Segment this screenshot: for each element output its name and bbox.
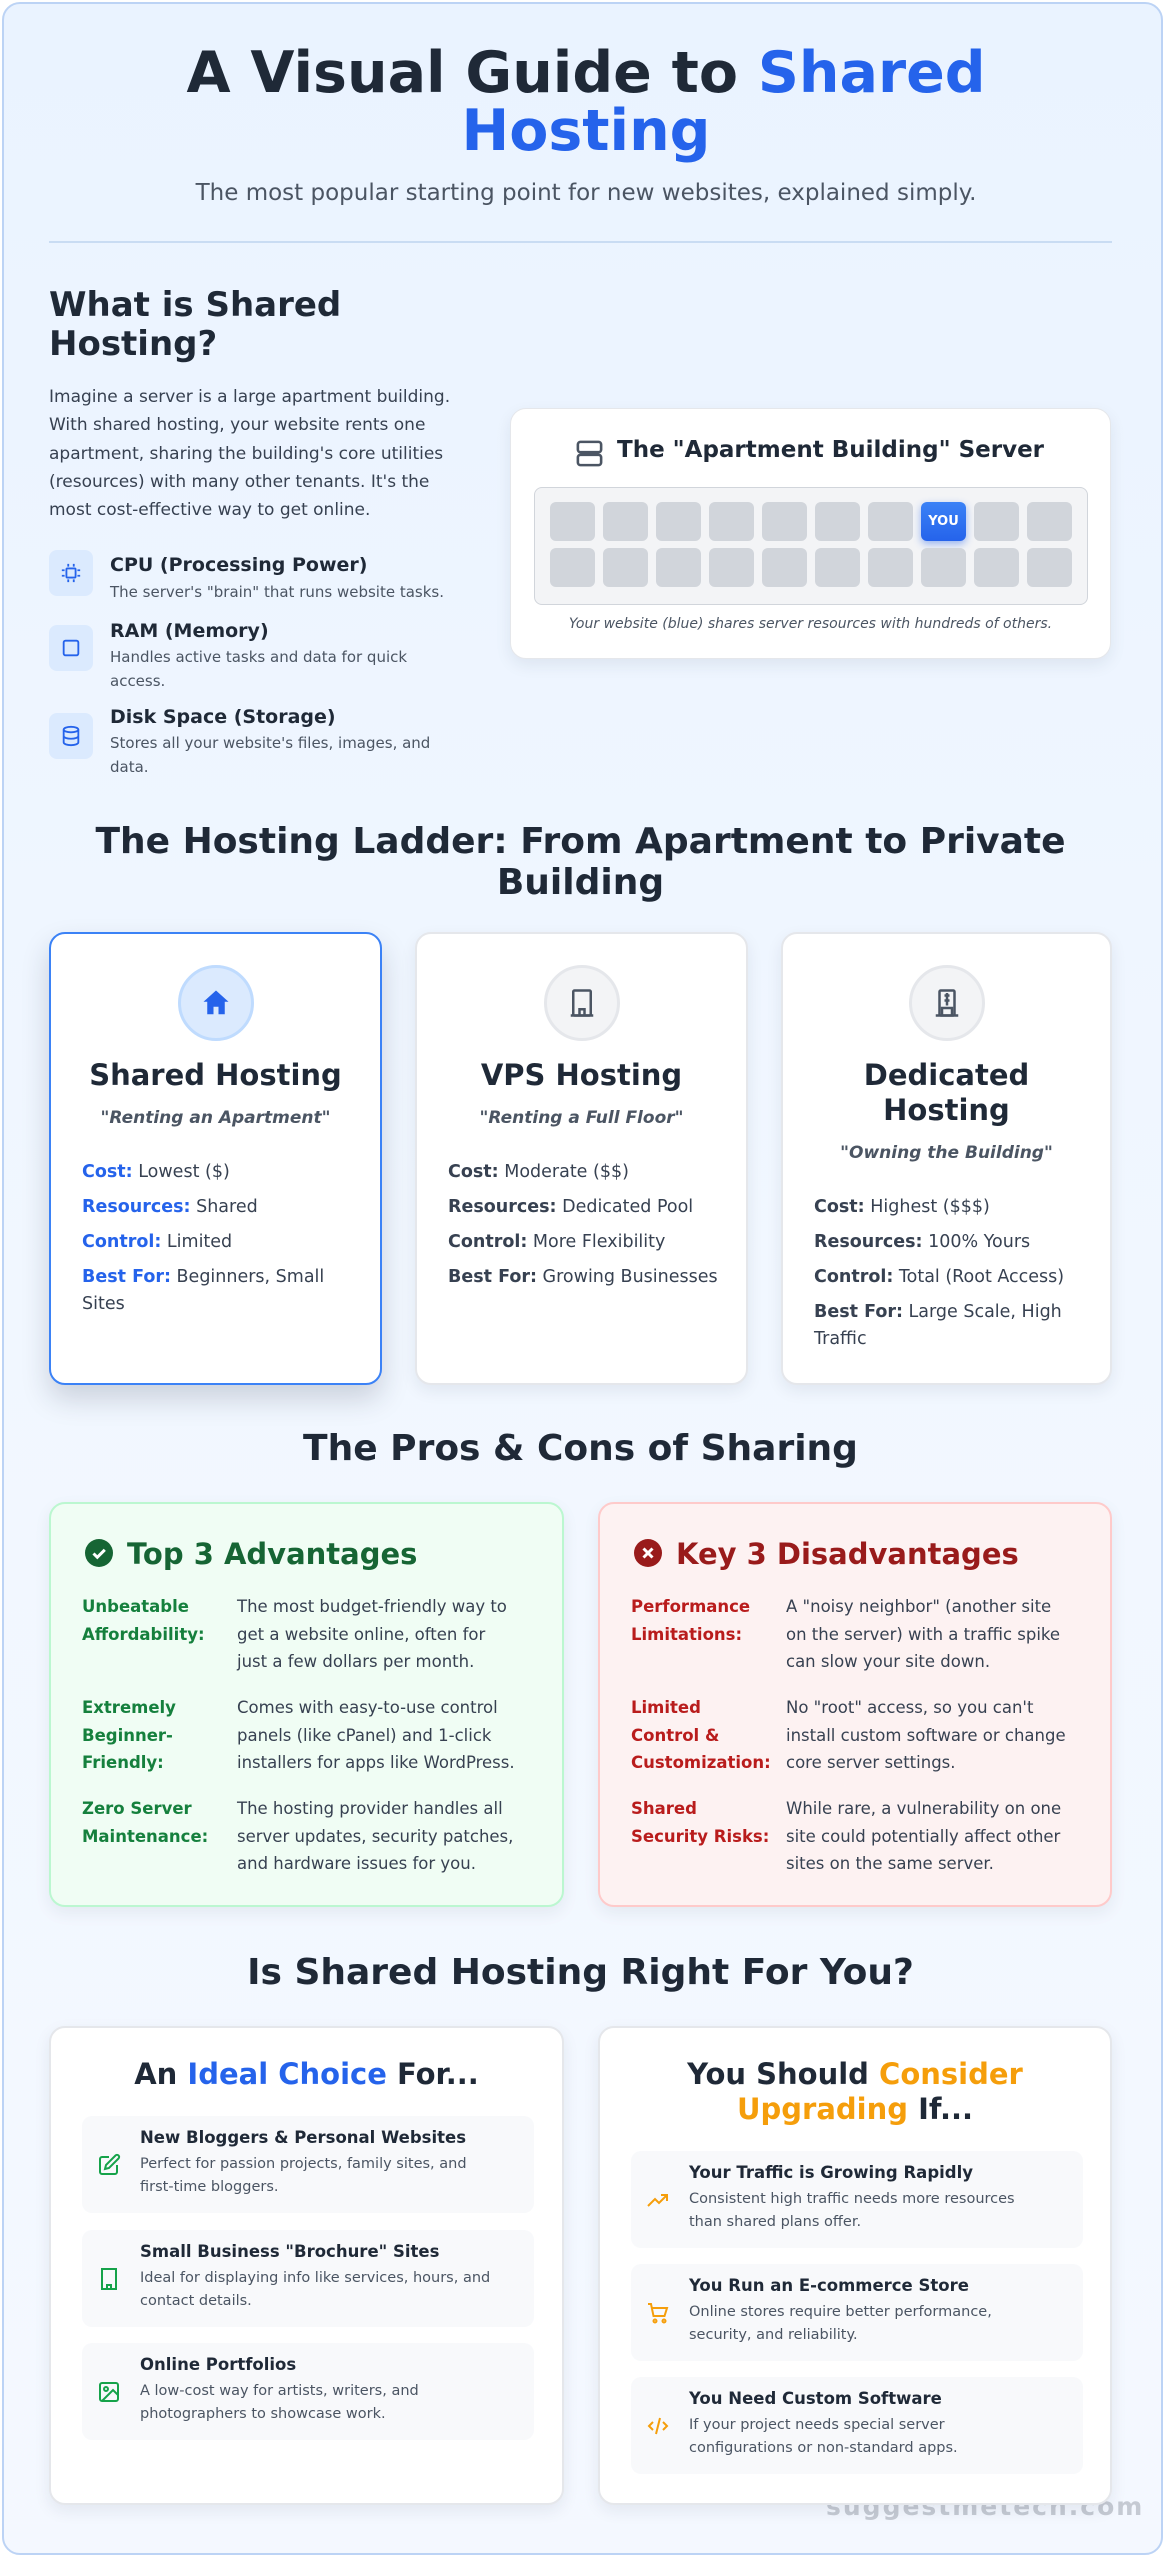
text block: explanation: (resources) with many other tenants. It's the xyxy=(49,472,429,492)
icon: building xyxy=(544,965,620,1041)
card: dedicated hosting: Traffic xyxy=(814,1329,867,1349)
card: VPS hosting xyxy=(415,932,748,1385)
panel: advantages: The hosting provider handles all xyxy=(237,1799,503,1818)
item: traffic xyxy=(631,2151,1083,2248)
text block: explanation: most cost-effective way to get online. xyxy=(49,500,370,520)
server grid xyxy=(534,487,1088,605)
title: A Visual Guide to Shared xyxy=(186,40,986,106)
item: traffic: than shared plans offer. xyxy=(689,2214,861,2230)
card: VPS hosting: VPS Hosting xyxy=(481,1058,682,1092)
icon: house xyxy=(178,965,254,1041)
item: custom software: You Need Custom Software xyxy=(689,2389,942,2408)
panel: disadvantages: site could potentially affect other xyxy=(786,1826,1060,1846)
panel: advantages: just a few dollars per month. xyxy=(237,1652,474,1671)
panel: disadvantages: install custom software or change xyxy=(786,1726,1066,1744)
item: business: Ideal for displaying info like services, hours, and xyxy=(140,2270,490,2286)
card: dedicated hosting: "Owning the Building" xyxy=(840,1143,1053,1163)
card: shared hosting: Resources: Shared xyxy=(82,1197,258,1217)
item: ecommerce: security, and reliability. xyxy=(689,2327,858,2343)
panel: consider upgrading: You Should Consider xyxy=(687,2057,1023,2091)
watermark: suggestmetech.com xyxy=(826,2492,1144,2521)
item: business xyxy=(82,2230,534,2327)
item: custom software: configurations or non-standard apps. xyxy=(689,2440,958,2456)
disadvantages heading: Key 3 Disadvantages xyxy=(676,1537,1019,1571)
panel: ideal choice xyxy=(49,2026,564,2505)
card: VPS hosting: Resources: Dedicated Pool xyxy=(448,1197,693,1217)
item: ecommerce: You Run an E-commerce Store xyxy=(689,2276,969,2295)
server grid: YOU xyxy=(928,514,959,529)
card: VPS hosting: "Renting a Full Floor" xyxy=(480,1108,683,1128)
panel: advantages: and hardware issues for you. xyxy=(237,1854,476,1873)
heading: hosting ladder: Building xyxy=(497,862,664,903)
item: portfolios xyxy=(82,2343,534,2440)
resource: Disk: Stores all your website's files, images, and xyxy=(110,734,430,752)
panel: disadvantages: Performance xyxy=(631,1597,750,1616)
panel: disadvantages xyxy=(598,1502,1112,1907)
panel: disadvantages: sites on the same server. xyxy=(786,1854,994,1873)
heading: is it right for you: Is Shared Hosting Right For You? xyxy=(247,1952,914,1993)
subtitle: The most popular starting point for new websites, explained simply. xyxy=(196,180,976,206)
item: business: contact details. xyxy=(140,2293,252,2309)
item: traffic: Your Traffic is Growing Rapidly xyxy=(689,2163,973,2182)
item: traffic: Consistent high traffic needs more resources xyxy=(689,2191,1015,2207)
heading: hosting ladder: The Hosting Ladder: From Apartment to Private xyxy=(95,821,1066,862)
panel: advantages: Maintenance: xyxy=(82,1826,208,1846)
panel: advantages xyxy=(49,1502,564,1907)
item: bloggers: New Bloggers & Personal Websites xyxy=(140,2128,466,2147)
panel: disadvantages: While rare, a vulnerability on one xyxy=(786,1799,1061,1818)
panel: apartment building server xyxy=(510,408,1111,659)
title xyxy=(186,40,986,164)
card: dedicated hosting: Resources: 100% Yours xyxy=(814,1232,1030,1252)
panel: advantages: Beginner- xyxy=(82,1726,173,1744)
panel: advantages: Comes with easy-to-use control xyxy=(237,1698,498,1717)
card: dedicated hosting: Cost: Highest ($$$) xyxy=(814,1197,990,1217)
panel: disadvantages: No "root" access, so you can't xyxy=(786,1698,1033,1717)
resource: CPU: CPU (Processing Power) xyxy=(110,554,367,576)
panel: advantages: Affordability: xyxy=(82,1624,205,1644)
icon: tower xyxy=(908,965,984,1041)
card: dedicated hosting: Hosting xyxy=(883,1093,1010,1127)
card: VPS hosting: Control: More Flexibility xyxy=(448,1232,665,1252)
card: VPS hosting: Best For: Growing Businesses xyxy=(448,1267,718,1287)
panel: disadvantages: Limitations: xyxy=(631,1624,742,1644)
text block: explanation xyxy=(49,387,450,520)
panel: advantages: get a website online, often for xyxy=(237,1624,485,1644)
panel: consider upgrading: Upgrading If... xyxy=(737,2092,973,2126)
resource: RAM: access. xyxy=(110,672,165,690)
card: dedicated hosting: Best For: Large Scale, High xyxy=(814,1302,1062,1322)
panel: disadvantages: Security Risks: xyxy=(631,1826,769,1846)
card: dedicated hosting: Control: Total (Root Access) xyxy=(814,1267,1064,1287)
item: business: Small Business "Brochure" Sites xyxy=(140,2242,439,2261)
card: shared hosting: Best For: Beginners, Small xyxy=(82,1267,324,1287)
resource: Disk: data. xyxy=(110,758,149,776)
panel: disadvantages: Control & xyxy=(631,1726,719,1744)
resource: Disk xyxy=(49,706,430,776)
panel: disadvantages: core server settings. xyxy=(786,1753,956,1772)
panel: advantages: The most budget-friendly way to xyxy=(237,1597,507,1616)
panel: advantages: Unbeatable xyxy=(82,1597,189,1616)
card: shared hosting: "Renting an Apartment" xyxy=(100,1108,330,1128)
server card title: The "Apartment Building" Server xyxy=(617,437,1044,463)
advantages heading: Top 3 Advantages xyxy=(127,1537,417,1571)
item: custom software: If your project needs special server xyxy=(689,2417,945,2433)
panel: disadvantages: A "noisy neighbor" (another site xyxy=(786,1597,1051,1616)
item: portfolios: photographers to showcase work. xyxy=(140,2406,386,2422)
resource: RAM: Handles active tasks and data for quick xyxy=(110,648,407,666)
item: portfolios: Online Portfolios xyxy=(140,2355,296,2374)
heading: what is shared hosting: Hosting? xyxy=(49,324,217,364)
card: VPS hosting: Cost: Moderate ($$) xyxy=(448,1162,629,1182)
panel: advantages: Friendly: xyxy=(82,1753,164,1772)
title: Hosting xyxy=(462,98,710,164)
resource: CPU xyxy=(49,550,444,601)
panel: advantages: panels (like cPanel) and 1-click xyxy=(237,1726,491,1744)
card: dedicated hosting xyxy=(781,932,1112,1385)
card: shared hosting: Shared Hosting xyxy=(89,1058,342,1092)
heading: what is shared hosting: What is Shared xyxy=(49,285,341,325)
panel: ideal choice: An Ideal Choice For... xyxy=(134,2057,479,2091)
resource: RAM: RAM (Memory) xyxy=(110,620,269,642)
heading: hosting ladder xyxy=(95,821,1066,903)
panel: advantages: Extremely xyxy=(82,1698,176,1717)
heading: pros & cons: The Pros & Cons of Sharing xyxy=(303,1428,858,1469)
caption: Your website (blue) shares server resources with hundreds of others. xyxy=(569,616,1052,632)
card: shared hosting xyxy=(49,932,382,1385)
panel: disadvantages: can slow your site down. xyxy=(786,1652,990,1671)
panel: disadvantages: Limited xyxy=(631,1698,701,1717)
panel: disadvantages: on the server) with a traffic spike xyxy=(786,1624,1060,1644)
panel: consider upgrading xyxy=(598,2026,1112,2505)
item: bloggers: first-time bloggers. xyxy=(140,2179,278,2195)
card: shared hosting: Control: Limited xyxy=(82,1232,232,1252)
panel: disadvantages: Customization: xyxy=(631,1753,771,1772)
item: custom software xyxy=(631,2377,1083,2474)
item: ecommerce: Online stores require better performance, xyxy=(689,2304,992,2320)
item: bloggers xyxy=(82,2116,534,2213)
panel: advantages: installers for apps like WordPress. xyxy=(237,1753,515,1772)
card: shared hosting: Cost: Lowest ($) xyxy=(82,1162,230,1182)
card: shared hosting: Sites xyxy=(82,1294,125,1314)
card: dedicated hosting: Dedicated xyxy=(864,1058,1029,1092)
text block: explanation: apartment, sharing the building's core utilities xyxy=(49,444,443,464)
resource: RAM xyxy=(49,620,407,690)
panel: advantages: server updates, security patches, xyxy=(237,1826,513,1846)
resource: Disk: Disk Space (Storage) xyxy=(110,706,336,728)
resource list xyxy=(49,550,444,776)
panel: advantages: Zero Server xyxy=(82,1799,192,1818)
resource: CPU: The server's "brain" that runs website tasks. xyxy=(110,583,444,601)
panel: disadvantages: Shared xyxy=(631,1799,697,1818)
item: bloggers: Perfect for passion projects, family sites, and xyxy=(140,2156,467,2172)
text block: explanation: With shared hosting, your website rents one xyxy=(49,415,425,435)
icon: server xyxy=(576,440,602,466)
heading: what is shared hosting xyxy=(49,285,341,364)
item: ecommerce xyxy=(631,2264,1083,2361)
text block: explanation: Imagine a server is a large apartment building. xyxy=(49,387,450,407)
item: portfolios: A low-cost way for artists, writers, and xyxy=(140,2383,419,2399)
